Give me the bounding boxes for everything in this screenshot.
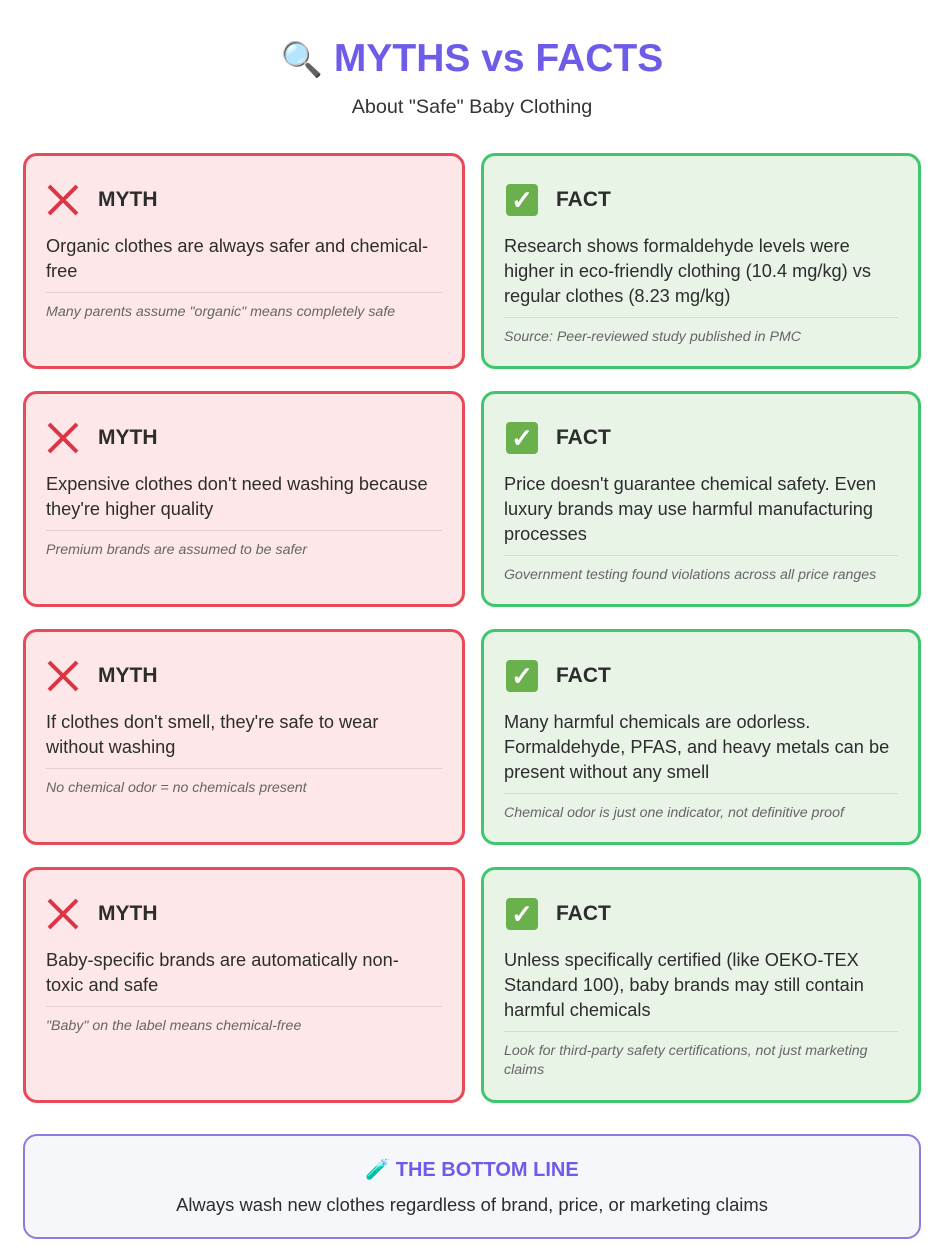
heading: myth: [48, 422, 158, 454]
text: [46, 712, 378, 757]
text: Many harmful chemicals are odorless. Formaldehyde, PFAS, and heavy metals can be present without any smell: [504, 712, 889, 782]
note: Many parents assume "organic" means completely safe: [46, 304, 395, 320]
note: [46, 530, 442, 560]
text: toxic and safe: [46, 975, 158, 995]
note: [504, 317, 898, 347]
heading: myth: [48, 898, 158, 930]
panel: myth 2: [23, 391, 465, 607]
note: Look for third-party safety certifications, not just marketing: [504, 1043, 868, 1059]
panel: fact 4: [481, 867, 921, 1103]
note: Government testing found violations across all price ranges: [504, 567, 876, 583]
note: [46, 1006, 442, 1036]
heading: fact: FACT: [556, 188, 611, 211]
note: No chemical odor = no chemicals present: [46, 780, 307, 796]
heading: myth: [48, 660, 158, 692]
note: claims: [504, 1062, 544, 1078]
text: Baby-specific brands are automatically non-: [46, 950, 399, 970]
note: Premium brands are assumed to be safer: [46, 542, 307, 558]
note: [504, 1031, 898, 1080]
heading: fact: [506, 422, 611, 454]
note: [504, 793, 898, 823]
panel: fact 3: [481, 629, 921, 845]
panel: fact 1: [481, 153, 921, 369]
heading: fact: ✓: [511, 422, 533, 452]
note: Chemical odor is just one indicator, not definitive proof: [504, 805, 844, 821]
heading: myth: MYTH: [98, 188, 158, 211]
heading: fact: [506, 898, 611, 930]
heading: fact: FACT: [556, 426, 611, 449]
heading: bottom line: 🧪 THE BOTTOM LINE: [365, 1159, 579, 1181]
panel: myth 4: [23, 867, 465, 1103]
heading: fact: ✓: [511, 660, 533, 690]
heading: fact: ✓: [511, 898, 533, 928]
text: Unless specifically certified (like OEKO-TEX Standard 100), baby brands may still contain harmful chemicals: [504, 950, 864, 1020]
text: Price doesn't guarantee chemical safety. Even luxury brands may use harmful manufacturing processes: [504, 474, 876, 544]
heading: myth: MYTH: [98, 664, 158, 687]
heading: fact: [506, 184, 611, 216]
text: Research shows formaldehyde levels were higher in eco-friendly clothing (10.4 mg/kg) vs regular clothes (8.23 mg/kg): [504, 236, 871, 306]
heading: fact: FACT: [556, 902, 611, 925]
heading: fact: [506, 660, 611, 692]
text: without washing: [46, 737, 175, 757]
text: Always wash new clothes regardless of brand, price, or marketing claims: [176, 1194, 768, 1215]
heading: fact: FACT: [556, 664, 611, 687]
text: Expensive clothes don't need washing because they're higher quality: [46, 474, 428, 519]
heading: fact: ✓: [511, 184, 533, 214]
text: If clothes don't smell, they're safe to wear: [46, 712, 378, 732]
subtitle: About "Safe" Baby Clothing: [352, 96, 592, 118]
heading: myth: MYTH: [98, 426, 158, 449]
note: [46, 292, 442, 322]
panel: myth 3: [23, 629, 465, 845]
text: Organic clothes are always safer and chemical-free: [46, 236, 428, 281]
note: Source: Peer-reviewed study published in PMC: [504, 329, 801, 345]
note: "Baby" on the label means chemical-free: [46, 1018, 301, 1034]
heading: myth: MYTH: [98, 902, 158, 925]
panel: myth 1: [23, 153, 465, 369]
heading: myth: [48, 184, 158, 216]
text: [46, 950, 399, 995]
title: 🔍 MYTHS vs FACTS: [281, 37, 663, 80]
panel: fact 2: [481, 391, 921, 607]
note: [46, 768, 442, 798]
note: [504, 555, 898, 585]
panel: bottom line: [23, 1134, 921, 1239]
